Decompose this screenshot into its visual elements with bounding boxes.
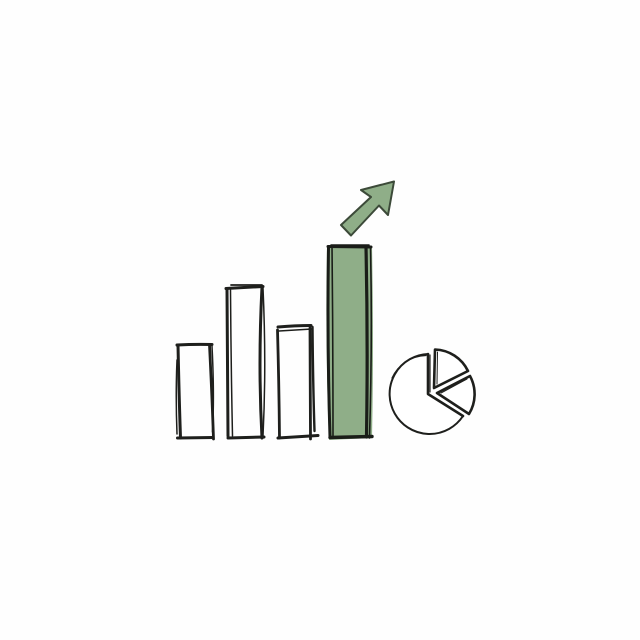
bar 4: tall green highlighted bar bbox=[326, 245, 373, 440]
icon: upward arrow bbox=[341, 182, 394, 236]
bar 3: medium outline bbox=[278, 326, 318, 439]
bar 2: tall outline bbox=[226, 285, 265, 438]
top pie slice bbox=[434, 350, 468, 388]
main pie piece bbox=[390, 354, 463, 434]
bar 1: short outline bbox=[176, 344, 214, 439]
icon: pie chart bbox=[390, 350, 475, 434]
right pie slice bbox=[437, 376, 475, 414]
